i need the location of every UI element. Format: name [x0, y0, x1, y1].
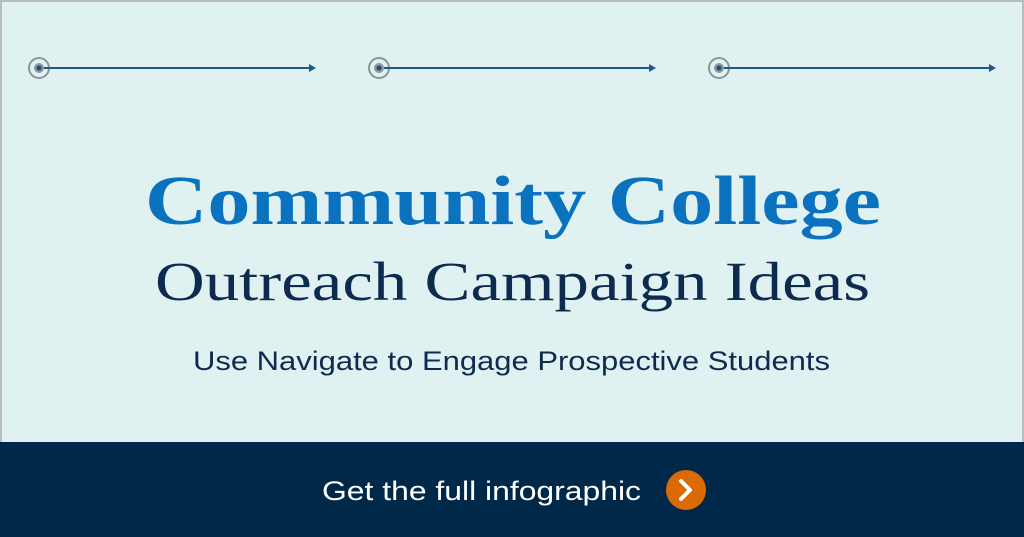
icon: orange arrow button: [666, 470, 706, 510]
footer band: [0, 442, 1024, 537]
arrow 1: [29, 58, 316, 78]
arrow 2: [369, 58, 656, 78]
tagline: Use Navigate to Engage Prospective Students: [193, 346, 830, 376]
title: Community College: [145, 163, 881, 240]
arrow 3: [709, 58, 996, 78]
subtitle: Outreach Campaign Ideas: [155, 251, 870, 312]
footer text: Get the full infographic: [322, 476, 641, 506]
